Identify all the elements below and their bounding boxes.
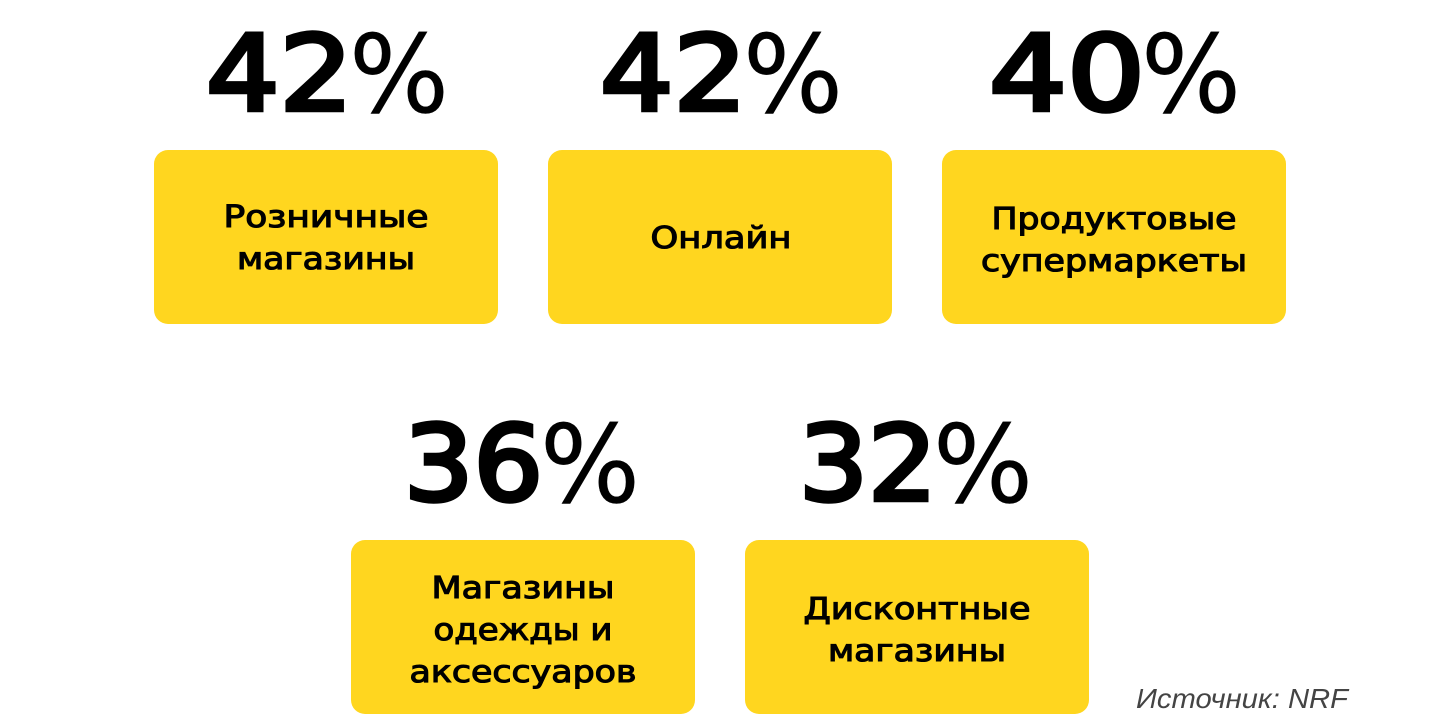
- label: discount stores: магазины: [828, 634, 1006, 669]
- stat: grocery supermarkets: [942, 13, 1286, 324]
- value: 40%: %: [1141, 13, 1241, 138]
- value: 32%: %: [933, 403, 1033, 528]
- value: 36%: %: [540, 403, 640, 528]
- value: 42%: %: [349, 13, 449, 138]
- label: online: Онлайн: [650, 221, 792, 256]
- label: retail stores: магазины: [237, 242, 415, 277]
- label: clothing and accessories stores: одежды и: [434, 613, 612, 648]
- label: grocery supermarkets: супермаркеты: [981, 244, 1247, 279]
- label: clothing and accessories stores: Магазины: [432, 571, 614, 606]
- stat: clothing and accessories stores: [351, 403, 695, 714]
- card: retail stores: [154, 150, 498, 324]
- label: retail stores: Розничные: [224, 200, 428, 235]
- card: discount stores: [745, 540, 1089, 714]
- label: discount stores: Дисконтные: [804, 592, 1030, 627]
- stat: online: [548, 13, 892, 324]
- card: grocery supermarkets: [942, 150, 1286, 324]
- value: 32%: 32: [799, 403, 937, 525]
- source note: Источник: NRF: [1136, 683, 1350, 714]
- stat: discount stores: [745, 403, 1089, 714]
- value: 42%: %: [743, 13, 843, 138]
- label: clothing and accessories stores: аксессуаров: [410, 655, 636, 690]
- label: grocery supermarkets: Продуктовые: [992, 202, 1236, 237]
- card: clothing and accessories stores: [351, 540, 695, 714]
- card: online: [548, 150, 892, 324]
- value: 40%: 40: [989, 13, 1145, 135]
- stat: retail stores: [154, 13, 498, 324]
- value: 42%: 42: [206, 13, 353, 135]
- value: 36%: 36: [404, 403, 543, 525]
- value: 42%: 42: [600, 13, 747, 135]
